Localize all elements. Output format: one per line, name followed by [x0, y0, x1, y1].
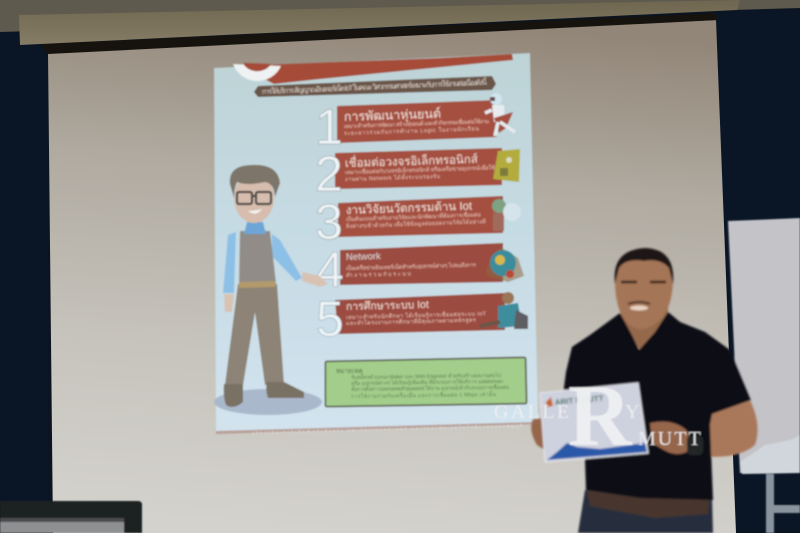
banner 2: [315, 146, 502, 202]
presenter: [531, 248, 758, 533]
smile: [630, 306, 648, 310]
icon: robot: [485, 93, 515, 136]
banner 5: 5: [316, 291, 344, 347]
face: [234, 173, 274, 223]
smile: [248, 209, 262, 214]
watermark: R: [568, 368, 633, 465]
right hand: [650, 422, 690, 454]
banner 3: สิ่งต่างๆเข้าด้วยกัน เพื่อใช้ข้อมูลต่อยอดงานวิจัยได้อย่างดี: [346, 217, 486, 230]
footer strip: บริการอินเทอร์เน็ตสำหรับสิ่งของ คณะวิศวกรรมศาสตร์ มหาวิทยาลัยเทคโนโลยีราชมงคลธัญบุรี: [252, 422, 522, 436]
banner 3: เป็นต้นแบบสำหรับงานวิจัยและนักพัฒนาที่ต้องการเชื่อมต่อ: [346, 210, 481, 223]
jeans: [578, 490, 713, 533]
slide background: [214, 53, 538, 431]
certificate: ARIT RMUTT: [554, 394, 604, 407]
banner 3: งานวิจัยนวัตกรรมด้าน Iot: [346, 200, 473, 217]
banner 2: เชื่อมต่อวงจรอิเล็กทรอนิกส์: [345, 151, 478, 170]
banner 3: 3: [315, 194, 343, 250]
icon: student reading: [480, 292, 528, 329]
watermark: GALLE: [494, 401, 572, 423]
subtitle pill: การให้บริการ สัญญาณอินเทอร์เน็ต IoT ในคณะ วิศวกรรมศาสตร์เหมาะกับการใช้งานต่อเนื่องดังนี้: [262, 77, 488, 96]
banner 2: 2: [315, 146, 343, 202]
banner 1: 1: [315, 99, 343, 155]
green note box: การใช้งานร่วมกับเครื่องอื่น และการเชื่อมต่อ 1 Mbps เท่านั้น: [351, 390, 496, 400]
laptop: [0, 501, 142, 533]
polo shirt: [563, 312, 751, 500]
header ribbon: [240, 54, 513, 84]
banner 2: เหมาะเชื่อมต่อกับวงจรอิเล็กทรอนิกส์ หรือเครือข่ายอุปกรณ์เพื่อใช้: [345, 163, 495, 176]
glasses: [237, 192, 271, 204]
banner 4: [316, 242, 503, 298]
banner 4: เป็นเครือข่ายอินเทอร์เน็ตสำหรับอุปกรณ์ต่างๆ ไปจนถึงการ: [346, 261, 476, 272]
banner 4: ทำงานร่วมกับระบบ: [346, 270, 412, 279]
watermark: Y: [625, 401, 639, 423]
banner 1: เหมาะสำหรับการพัฒนา สร้างหุ่นยนต์ และทำกิจกรรมเชื่อมต่อใช้งาน: [344, 117, 489, 130]
vest: [239, 231, 276, 285]
green note box: หรือ อุปกรณ์ต่างๆ ได้เรียนรู้เพิ่มเติม ที่มีระบบการใช้บริการ subdomain: [351, 377, 503, 387]
banner 1: ระยะยาวร่วมกับการทำงาน Logic ในงานนักเรียน: [344, 124, 479, 137]
floor shadow: [214, 389, 322, 415]
icon: globe: [486, 247, 524, 282]
arm: [655, 400, 758, 457]
watermark: [494, 368, 703, 465]
head: [615, 250, 673, 329]
hair: [230, 165, 280, 198]
left hand: [531, 418, 548, 452]
hands: [224, 272, 328, 312]
footer strip: [216, 422, 538, 436]
screen housing: [19, 0, 740, 54]
green note box: รับสมัครตำแหน่ง Maker และ Web Engineer สำหรับสร้างผลงานต่อไป: [351, 371, 501, 381]
watermark: MUTT: [638, 428, 703, 450]
banner 4: 4: [316, 242, 344, 298]
banner 5: การศึกษาระบบ Iot: [346, 299, 429, 313]
banner 2: งานผ่าน Network ได้ทั้งระบบรองรับ: [345, 172, 441, 183]
hair: [615, 248, 673, 284]
moustache: [628, 302, 650, 304]
header circle: [233, 64, 281, 81]
arms: [223, 232, 302, 293]
neck and collar: [244, 222, 266, 234]
icon: researcher: [492, 199, 521, 231]
eyes and brows: [621, 281, 666, 283]
whiteboard: [728, 218, 800, 533]
banner 4: Network: [346, 251, 381, 263]
banner 5: [316, 291, 505, 347]
banner 1: [315, 99, 497, 155]
neck: [620, 305, 668, 350]
belt: [586, 487, 710, 518]
header circle inner: [243, 63, 271, 71]
certificate: [540, 383, 648, 462]
icon: circuit board: [493, 149, 520, 182]
shoes: [224, 382, 304, 407]
banner 3: [315, 194, 503, 250]
green note box: ทั้งการตั้งค่า Username/Password ให้งาน อุปกรณ์เข้ากับระบบการเชื่อมต่อ: [351, 383, 509, 393]
watch: [687, 436, 703, 455]
banner 1: การพัฒนาหุ่นยนต์: [344, 107, 441, 125]
legs: [225, 284, 284, 385]
green note box: หมายเหตุ: [336, 368, 363, 375]
banner 5: เหมาะสำหรับนักศึกษา ได้เรียนรู้การเชื่อมต่อระบบ IoT: [346, 309, 487, 321]
character illustration: [214, 165, 328, 415]
green note box: [327, 359, 525, 405]
belt: [239, 281, 276, 288]
banner 5: และทำโครงงานการศึกษาที่มีคุณภาพตามหลักสูตร: [346, 316, 476, 327]
